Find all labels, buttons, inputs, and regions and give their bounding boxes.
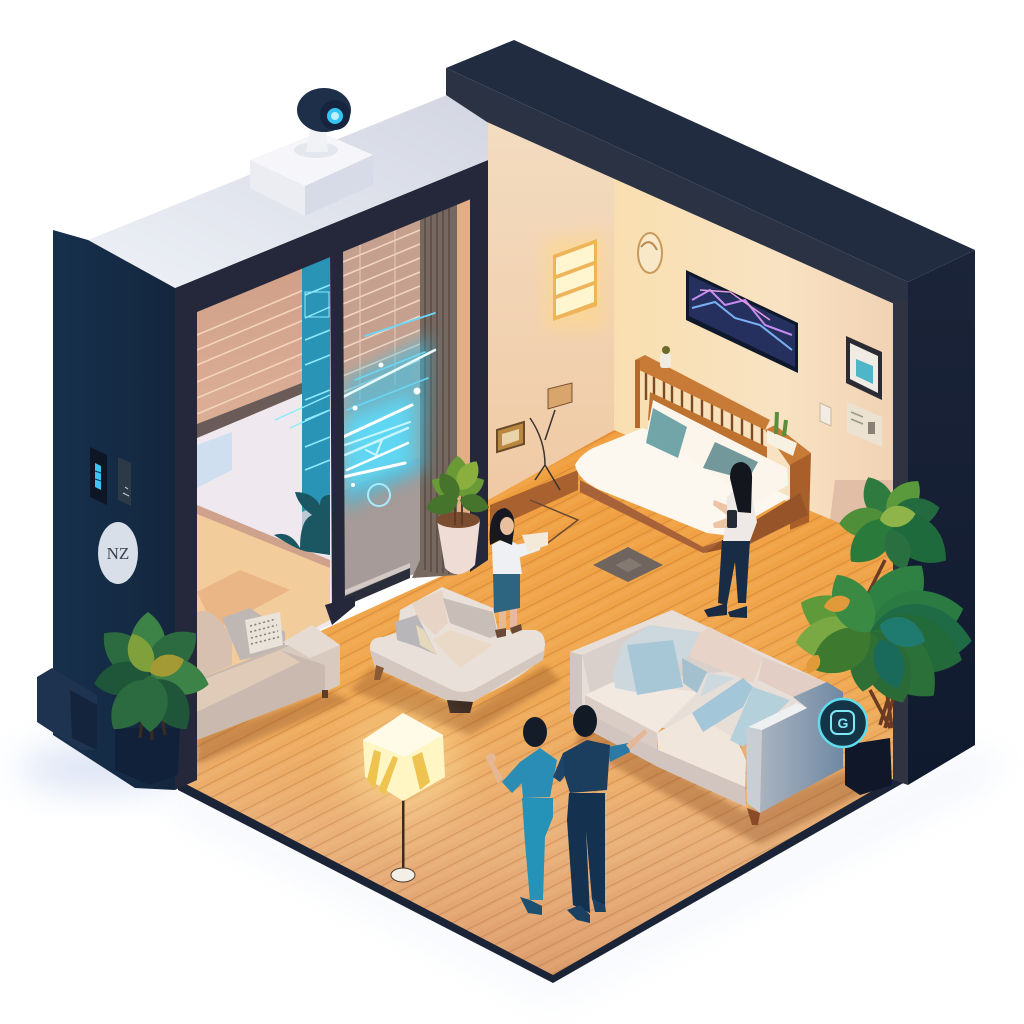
wall clock	[638, 233, 662, 273]
holographic data overlay	[343, 313, 435, 510]
floor edge	[178, 772, 905, 983]
man in navy	[553, 705, 647, 923]
right window pane with door	[343, 212, 425, 606]
headboard	[635, 355, 811, 530]
left back wall	[488, 122, 614, 505]
plant shadow on wall	[830, 480, 895, 550]
center armchair sofa	[370, 587, 545, 713]
dark pots and glowing badge	[819, 699, 892, 795]
floor shadows	[197, 665, 880, 845]
right dark wall	[893, 250, 975, 785]
woman in white shirt at bed	[704, 462, 757, 618]
outdoor plant silhouette	[274, 492, 330, 555]
vase and tray on headboard	[660, 346, 797, 456]
roof slab	[88, 95, 488, 288]
framed wall picture	[846, 336, 882, 400]
large plant right	[792, 471, 974, 728]
ground shadow	[20, 744, 1000, 1000]
woman holding tablet	[490, 508, 548, 638]
rug	[490, 470, 578, 530]
roof beam	[446, 40, 975, 310]
round wall logo	[98, 522, 138, 584]
wall sconce light	[545, 232, 605, 330]
wall control panels	[847, 402, 882, 447]
potted plant by window	[424, 456, 491, 574]
light switch	[820, 403, 831, 426]
security camera on box	[250, 88, 373, 216]
man in teal	[486, 717, 557, 915]
curtain	[412, 192, 470, 578]
round wall logo: NZ	[107, 544, 129, 563]
wall switch	[118, 457, 131, 506]
window frame	[175, 160, 488, 790]
wall boards and wire	[497, 383, 578, 545]
big sofa	[570, 610, 843, 825]
dark pots and glowing badge: G	[838, 715, 849, 731]
bed	[575, 400, 808, 553]
wall TV	[686, 270, 798, 373]
bottom left box	[37, 668, 97, 750]
window interior	[197, 250, 340, 690]
wall touch panel	[90, 447, 107, 505]
floor lamp	[343, 710, 463, 882]
plant left	[91, 611, 213, 785]
left sofa	[197, 608, 340, 740]
wooden floor	[178, 430, 900, 978]
left dark wall	[53, 230, 175, 790]
floor vent	[593, 547, 663, 582]
right back wall	[614, 170, 895, 550]
